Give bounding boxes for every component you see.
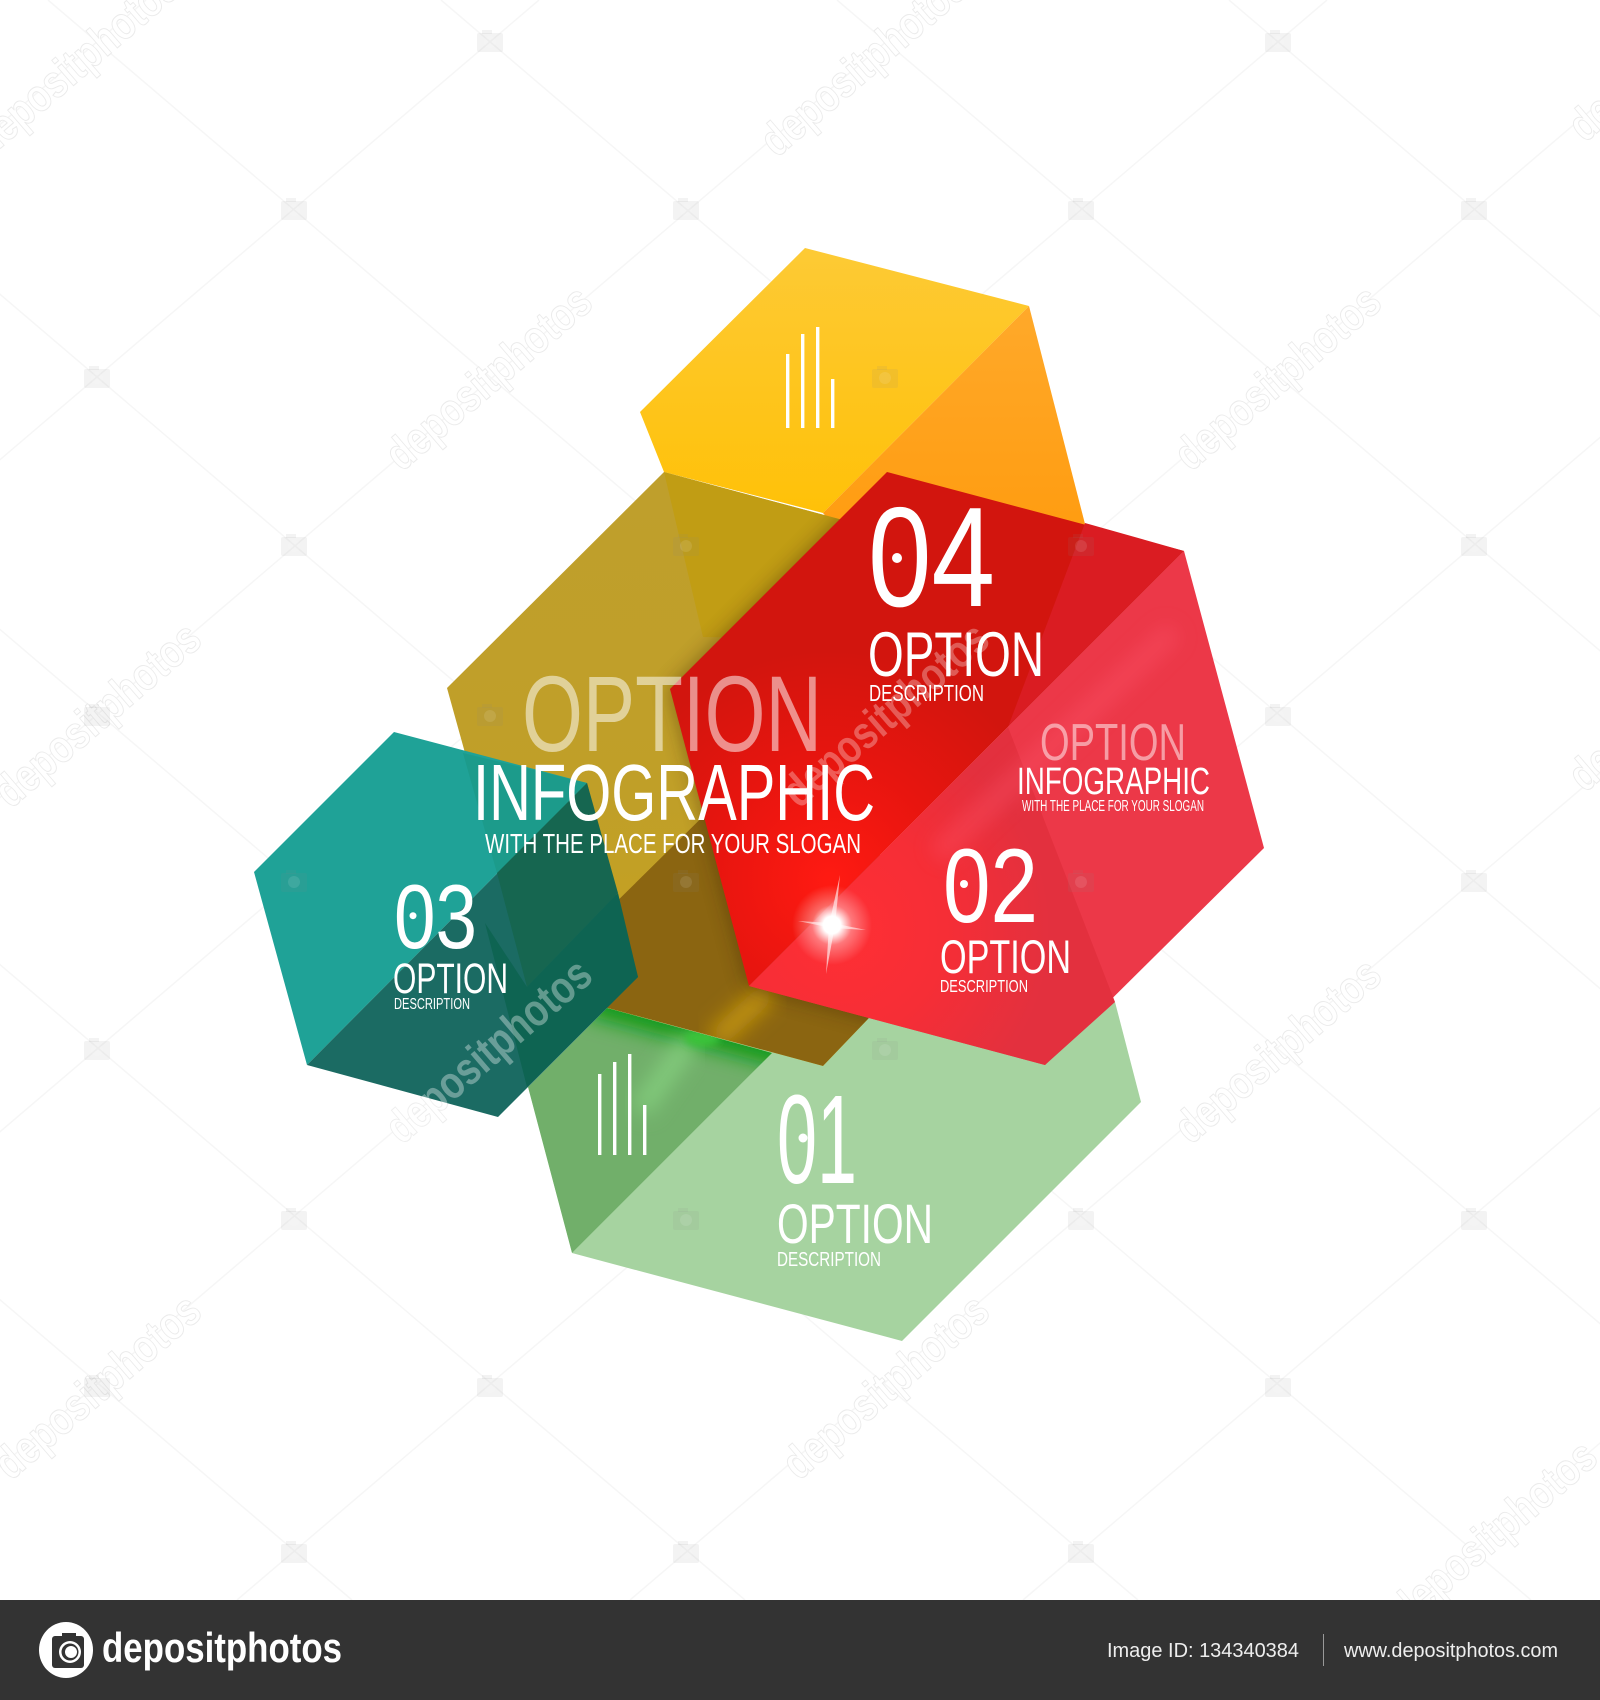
title block	[473, 653, 875, 859]
label: description 01: DESCRIPTION	[777, 1249, 881, 1271]
label: description 02: DESCRIPTION	[940, 976, 1028, 996]
watermark pattern: depositphotos	[374, 274, 602, 480]
title: INFOGRAPHIC: INFOGRAPHIC	[473, 748, 875, 837]
panel: yellow hexagon	[640, 248, 1085, 570]
red lower overlap	[749, 727, 1115, 1065]
green hexagon light face	[528, 900, 1141, 1341]
teal olive overlap	[463, 753, 587, 873]
teal overlap upper	[497, 783, 618, 987]
footer background	[0, 1600, 1600, 1700]
label: description 04: DESCRIPTION	[869, 680, 984, 706]
watermark pattern: depositphotos	[374, 947, 602, 1153]
icon: yellow bars	[786, 327, 834, 428]
yellow face	[640, 248, 1029, 513]
watermark pattern: depositphotos	[1163, 274, 1391, 480]
watermark over panels	[374, 611, 999, 1153]
panel: green hexagon 01	[528, 1002, 1141, 1341]
icon: green bars	[598, 1054, 646, 1155]
watermark over panels: depositphotos	[374, 947, 602, 1153]
number 04: 04	[868, 478, 995, 637]
red dark upper face	[670, 472, 1184, 986]
small title block	[1017, 714, 1210, 815]
lens flare	[792, 875, 872, 974]
label: option 03: OPTION	[393, 955, 508, 1003]
small title block: INFOGRAPHIC	[1017, 761, 1210, 803]
title: OPTION: OPTION	[522, 653, 822, 774]
logo wordmark: depositphotos	[102, 1624, 342, 1671]
brown fold	[607, 818, 868, 1066]
overlap with yellow	[664, 472, 880, 640]
label: option 02: OPTION	[940, 930, 1071, 983]
red upper overlap	[1008, 523, 1184, 727]
small title block: WITH THE PLACE FOR YOUR SLOGAN	[1022, 798, 1204, 815]
footer divider	[1323, 1634, 1324, 1666]
slogan: WITH THE PLACE FOR YOUR SLOGAN	[485, 828, 861, 859]
image id: Image ID: 134340384	[1107, 1640, 1299, 1662]
number 02: 02	[943, 828, 1038, 945]
label: option 01: OPTION	[777, 1192, 933, 1255]
watermark pattern: depositphotos	[771, 1283, 999, 1489]
light streak along fold	[937, 630, 1174, 855]
website: www.depositphotos.com	[1343, 1640, 1558, 1662]
teal overlap lower	[485, 893, 638, 1087]
panel: teal hexagon 03	[254, 732, 638, 1117]
panel: red hexagon 02 and 04	[670, 472, 1264, 1065]
footer bar	[0, 1600, 1600, 1700]
teal dark fold	[307, 783, 638, 1117]
panel: olive centre hexagon	[447, 472, 880, 1066]
number 01: 01	[777, 1069, 857, 1210]
number 03: 03	[394, 867, 477, 968]
red panel shadow on olive	[663, 516, 869, 1025]
label: option 04: OPTION	[868, 620, 1044, 690]
small title block: OPTION	[1040, 714, 1186, 772]
green hexagon dark fold	[528, 1000, 790, 1253]
teal light face	[254, 732, 587, 1065]
number 01	[777, 1069, 857, 1210]
olive main face	[447, 472, 880, 1066]
watermark camera icons	[84, 30, 1487, 1563]
red light lower face	[749, 551, 1264, 1065]
icon: camera logo	[39, 1622, 93, 1678]
watermark over panels: depositphotos	[771, 611, 999, 817]
orange fold	[823, 306, 1085, 570]
label: description 03: DESCRIPTION	[394, 996, 470, 1013]
watermark pattern: depositphotos	[1163, 947, 1391, 1153]
